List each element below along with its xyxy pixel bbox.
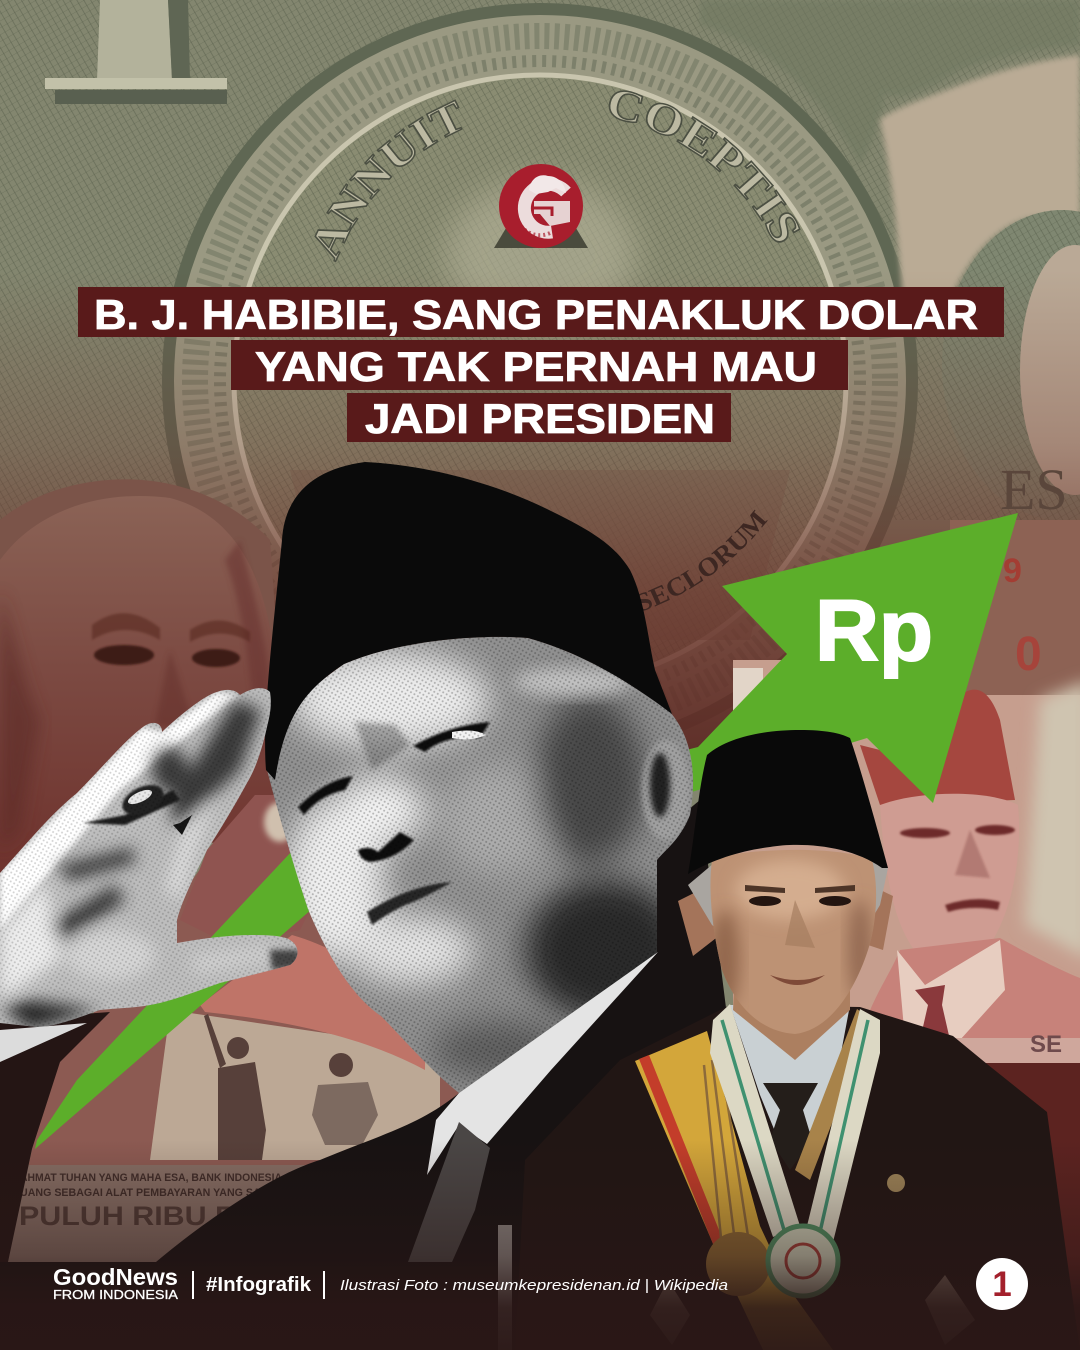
tie <box>408 1122 490 1262</box>
jacket <box>0 800 770 1350</box>
page number badge <box>976 1258 1028 1310</box>
ribbon stripes <box>722 1020 868 1232</box>
text: note lettering ES: ES <box>1000 457 1068 522</box>
hair sides <box>688 855 888 935</box>
text: COEPTIS: COEPTIS <box>608 90 800 243</box>
face and neck shading <box>260 620 700 1100</box>
white outer finger band <box>0 692 240 930</box>
illustration: saluting man <box>0 462 770 1350</box>
illustration: Habibie portrait <box>515 730 1080 1350</box>
footer logo: GoodNews: FROM INDONESIA <box>53 1287 178 1302</box>
sash <box>635 1031 833 1350</box>
icon: GoodNews garuda logo <box>499 164 583 248</box>
arm sleeve <box>0 1012 110 1262</box>
text: SE: SE <box>1030 1031 1062 1058</box>
lower print strip <box>6 1165 340 1262</box>
Soekarno features <box>900 825 1015 912</box>
heading line 1: B. J. HABIBIE, SANG PENAKLUK DOLAR <box>94 291 978 338</box>
footer logo: GoodNews <box>53 1264 178 1302</box>
tie <box>763 1083 818 1170</box>
sash striped inner left <box>704 1055 748 1248</box>
page number badge: 1 <box>992 1265 1012 1304</box>
Soekarno shirt <box>897 940 1005 1040</box>
peci cap <box>265 462 672 780</box>
eyes <box>94 645 154 665</box>
pale watermark zone <box>1025 680 1080 960</box>
crease and ring <box>83 790 180 825</box>
icon: pyramid eye triangle <box>494 170 588 248</box>
ears <box>678 885 893 956</box>
divider <box>323 1271 325 1299</box>
panel: Franklin portrait banknote <box>0 479 290 900</box>
lapel pin <box>887 1174 905 1192</box>
jacket <box>515 1005 1080 1350</box>
panel: rupiah note lower left <box>6 795 480 1262</box>
heading bar 3 <box>347 393 731 442</box>
hand <box>0 688 298 1027</box>
shirt cuff <box>0 1023 87 1062</box>
trees <box>180 795 325 945</box>
glow behind eye <box>446 180 636 330</box>
panel: rupiah note right <box>733 520 1080 1350</box>
footer logo: GoodNews: GoodNews <box>53 1264 178 1290</box>
neck <box>733 975 850 1060</box>
heading line 3: JADI PRESIDEN <box>365 395 715 442</box>
text: SECLORUM on seal: SECLORUM <box>640 510 768 611</box>
sash striped inner right <box>795 1009 872 1180</box>
hair <box>0 590 40 850</box>
tent beige <box>150 1010 440 1160</box>
gold medal <box>706 1232 770 1296</box>
heading bar 1 <box>78 287 1004 337</box>
icon: top-left pillar <box>45 0 227 104</box>
background: bottom dark fade <box>0 1140 1080 1350</box>
panel: dollar seal engraving <box>0 0 1080 668</box>
soldiers <box>204 1014 378 1160</box>
lower pyramid tone <box>290 470 790 640</box>
ribbon right <box>807 1009 880 1242</box>
top-right scroll ornament <box>700 0 1080 165</box>
flag <box>200 935 425 1070</box>
maroon below note <box>980 1063 1080 1350</box>
decorative star medals <box>650 1275 975 1345</box>
text: ANNUIT: ANNUIT <box>314 99 463 262</box>
heading line 2: YANG TAK PERNAH MAU <box>255 343 817 390</box>
Soekarno suit <box>860 938 1080 1040</box>
text: note small print: AHMAT TUHAN YANG MAHA ESA, BANK INDONESIA <box>20 1172 282 1184</box>
Soekarno tie <box>915 985 950 1040</box>
serial digit 0: 0 <box>1015 628 1042 681</box>
text: Rp: Rp <box>815 583 933 679</box>
text: note value: PULUH RIBU RU <box>19 1201 259 1231</box>
background: red-brown toning overlay <box>0 270 1080 770</box>
face <box>710 850 876 1034</box>
paper patch right <box>880 55 1080 330</box>
Soekarno peci <box>860 690 1015 805</box>
peci cap <box>688 730 888 874</box>
text: note small print line 2: UANG SEBAGAI ALAT PEMBAYARAN YANG SAH DI <box>20 1187 282 1199</box>
heading bar 2 <box>231 340 848 390</box>
divider <box>192 1271 194 1299</box>
serial digit 9: 9 <box>1003 552 1022 590</box>
shirt streak lower <box>498 1225 512 1350</box>
Soekarno face <box>880 794 1019 972</box>
hashtag: #Infografik <box>206 1274 312 1296</box>
green medal <box>768 1226 838 1296</box>
title <box>78 287 1004 442</box>
sash red stripe <box>639 1055 727 1254</box>
right O ring <box>942 210 1080 520</box>
photo credit: Ilustrasi Foto : museumkepresidenan.id | Wikipedia <box>340 1277 728 1294</box>
white collar <box>427 952 658 1175</box>
shirt <box>730 1005 850 1168</box>
ribbon left <box>710 1004 800 1237</box>
